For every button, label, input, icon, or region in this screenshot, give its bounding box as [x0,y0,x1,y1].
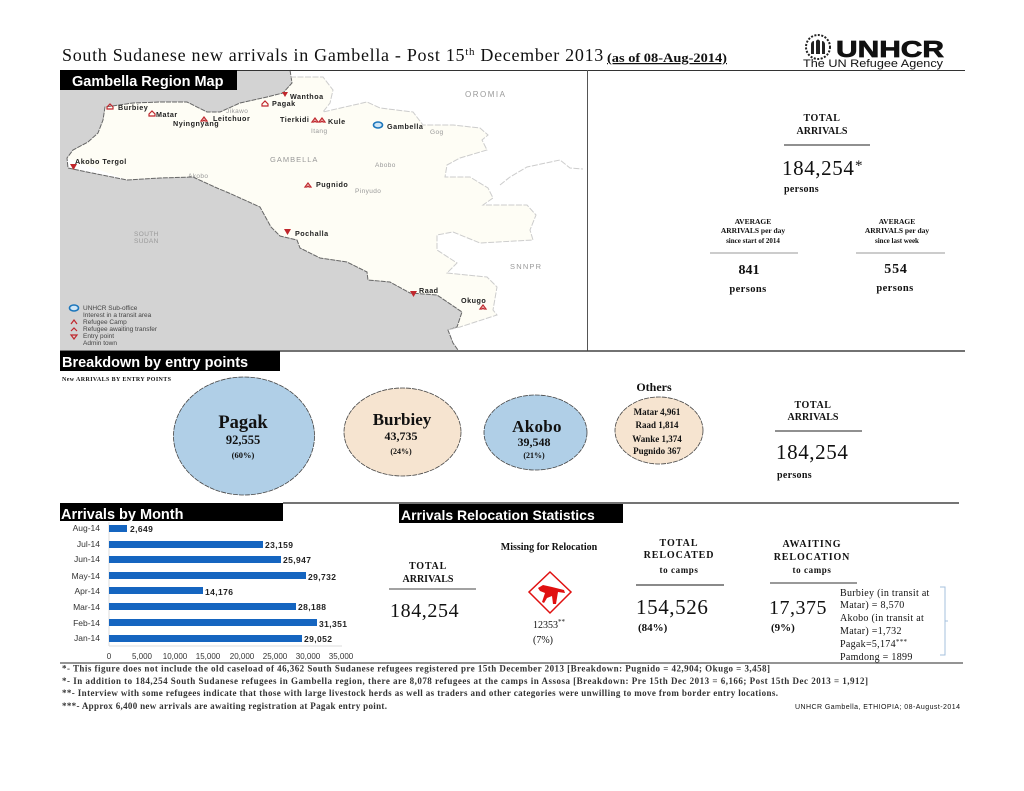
heading: Breakdown by entry points: Breakdown by entry points [62,355,248,371]
bar: Mar-14: 28,188 [298,602,326,612]
bar: Mar-14 [73,602,326,612]
map: legend [70,305,158,347]
stat: average arrivals since last week: 554 [884,262,908,277]
bubble: Akobo: 39,548 [518,435,550,449]
footnotes: *- This figure does not include the old caseload of 46,362 South Sudanese refugees registered pre 15th December 2013 [Breakdown: Pugnido = 42,904; Okugo = 3,458] [62,664,770,674]
bar: Jan-14 [74,633,332,644]
bubble: Pagak: (60%) [232,450,254,460]
bubble: Others: Matar 4,961 [634,407,681,417]
callout: awaiting relocation breakdown: Pamdong = 1899 [840,652,913,663]
bubble: Others: Raad 1,814 [635,420,679,430]
bar: Jul-14: Jul-14 [77,539,100,549]
icon: UNHCR logo: UNHCR [836,36,944,62]
stat: average arrivals since last week: ARRIVALS per day [865,226,929,235]
map: place labels: Itang [311,128,327,135]
stat: total arrivals [782,113,870,195]
map: place labels: Nyingnyang [173,119,219,128]
map: place labels: Kule [328,117,346,126]
chart axis labels: 0 [107,652,112,661]
bar: Apr-14: 14,176 [205,587,233,597]
map: place labels: OROMIA [465,90,506,99]
map: place labels: Jikawo [226,108,248,115]
map: place labels: Tierkidi [280,115,309,124]
stat: missing for relocation: Missing for Relocation [501,542,598,553]
map: international border [67,70,462,350]
map: place labels: SNNPR [510,262,542,271]
map: place labels: Okugo [461,296,486,305]
stat: average arrivals since last week: persons [876,283,914,294]
title: December 2013 [475,45,604,65]
icon: UNHCR logo: The UN Refugee Agency [803,58,944,70]
footnotes: ***- Approx 6,400 new arrivals are awaiting registration at Pagak entry point. [62,701,387,711]
bar: Apr-14 [74,586,233,597]
chart axis labels: 35,000 [329,652,354,661]
bar: Jul-14 [77,539,293,550]
callout: awaiting relocation breakdown: Pagak=5,174 [840,639,896,650]
bar: Aug-14: Aug-14 [73,523,100,533]
chart axis labels [107,652,354,661]
bubble: Akobo: Akobo [512,417,562,436]
stat: average arrivals since last week [856,217,945,294]
map: place labels: Raad [419,286,439,295]
map: place labels: Akobo Tergol [75,157,127,166]
callout: awaiting relocation breakdown: Matar) = 8,570 [840,600,905,611]
bar: Feb-14: 31,351 [319,619,347,629]
stat: average arrivals since last week: AVERAGE [879,217,915,226]
stat: total arrivals: persons [784,184,819,195]
map: place labels: Wanthoa [290,92,324,101]
stat: missing for relocation [501,542,598,646]
stat: total arrivals (entry points): ARRIVALS [788,412,839,423]
map: place labels: Gog [430,129,444,136]
footnotes: *- In addition to 184,254 South Sudanese refugees in Gambella region, there are 8,078 refugees at the camps in Assosa [Breakdown: Pre 15th Dec 2013 = 6,166; Post 15th Dec 2013 = 1,912] [62,676,868,686]
map: place labels: Abobo [375,162,396,169]
callout: awaiting relocation breakdown [840,587,948,663]
stat: average arrivals since start: persons [729,284,767,295]
bar: Apr-14: Apr-14 [74,586,100,596]
title [62,45,727,65]
map: place labels: Pochalla [295,229,329,238]
bubble: Others: Others [636,380,672,394]
bar: Jun-14: 25,947 [283,555,311,565]
callout: awaiting relocation breakdown: Akobo (in transit at [840,613,924,624]
bar: Jun-14: Jun-14 [74,554,100,564]
stat: awaiting relocation [769,539,857,634]
map: place labels: Leitchuor [213,114,250,123]
stat: total arrivals: TOTAL [803,113,841,124]
panel: entry point bubbles [174,377,703,495]
map: legend: Entry point [83,333,114,340]
bar: Jun-14 [74,554,311,565]
panel: headline totals [710,113,945,295]
stat: awaiting relocation: 17,375 [769,597,827,619]
stat: missing for relocation: 12353 [533,620,558,631]
callout: awaiting relocation breakdown: Burbiey (in transit at [840,588,930,599]
stat: average arrivals since start: 841 [738,263,760,278]
bar: Jan-14: 29,052 [304,634,332,644]
map: place labels [75,90,542,305]
bubble: Others [615,380,703,464]
bar: Feb-14 [73,618,347,629]
heading: Arrivals by Month [60,503,283,523]
stat: awaiting relocation: RELOCATION [774,552,850,563]
map: legend: Refugee awaiting transfer [83,326,158,333]
stat: total arrivals (entry points): 184,254 [776,440,848,464]
stat: total arrivals: * [855,158,862,174]
map: legend: UNHCR Sub-office [83,305,138,312]
stat: total arrivals (entry points): TOTAL [794,400,832,411]
stat: total arrivals: ARRIVALS [797,126,848,137]
stat: total arrivals (relocation): ARRIVALS [403,574,454,585]
bubble: Burbiey [344,388,461,476]
bar chart: arrivals by month [72,522,354,661]
stat: total relocated: RELOCATED [644,550,714,561]
stat: total arrivals (entry points): persons [777,470,812,481]
title: th [465,46,475,58]
map: South Sudan territory [60,70,462,350]
stat: average arrivals since last week: since last week [875,237,919,245]
map: legend: Refugee Camp [83,319,127,326]
title: (as of 08-Aug-2014) [607,51,727,65]
stat: total relocated [636,538,724,634]
stat: total arrivals: 184,254 [782,156,854,180]
map: place labels: Burbiey [118,103,148,112]
stat: total arrivals (relocation): TOTAL [409,561,447,572]
source credit: UNHCR Gambella, ETHIOPIA; 08-August-2014 [795,704,960,711]
map: place labels: Akobo [188,173,208,180]
map: place labels: Pugnido [316,180,348,189]
heading: Breakdown by entry points [60,351,280,371]
stat: awaiting relocation: to camps [792,565,832,575]
stat: total relocated: TOTAL [659,538,699,549]
stat: total arrivals (entry points) [775,400,862,481]
caption: new arrivals by entry points: New ARRIVALS BY ENTRY POINTS [62,377,172,383]
callout: awaiting relocation breakdown: *** [896,638,907,646]
map: place labels: Pinyudo [355,188,381,195]
stat: missing for relocation: ** [558,618,566,626]
chart axis labels: 25,000 [263,652,288,661]
map: place labels: GAMBELLA [270,155,318,164]
heading: Arrivals by Month: Arrivals by Month [61,507,183,523]
icon: UNHCR logo [803,35,944,70]
bubble: Burbiey: Burbiey [373,410,432,429]
bubble: Burbiey: (24%) [390,447,412,456]
stat: missing for relocation: (7%) [533,635,553,646]
map: place labels: SUDAN [134,238,159,245]
bar: Jul-14: 23,159 [265,540,293,550]
stat: average arrivals since start: since start of 2014 [726,237,780,245]
map: place labels: Matar [156,110,178,119]
stat: total arrivals (relocation): 184,254 [390,600,459,622]
map: regional boundaries [290,77,583,330]
callout: awaiting relocation breakdown: Matar) =1,732 [840,626,902,637]
stat: awaiting relocation: (9%) [771,622,795,634]
map: legend: Admin town [83,340,117,347]
stat: total arrivals (relocation) [389,561,476,622]
stat: total relocated: to camps [659,565,699,575]
heading: Arrivals Relocation Statistics: Arrivals Relocation Statistics [401,507,595,523]
bubble: Pagak: 92,555 [226,433,260,447]
bar: Jan-14: Jan-14 [74,633,100,643]
rule lines [60,70,965,663]
bar: Aug-14 [73,523,153,534]
stat: awaiting relocation: AWAITING [783,539,841,550]
heading: Gambella Region Map [60,70,237,90]
bubble: Burbiey: 43,735 [384,429,418,443]
footnotes [62,664,868,711]
icon: red warning diamond [529,572,571,613]
bar: Aug-14: 2,649 [130,524,153,534]
chart axis labels: 15,000 [196,652,221,661]
title: South Sudanese new arrivals in Gambella - Post 15 [62,45,465,65]
bar: May-14: 29,732 [308,572,336,582]
stat: total relocated: (84%) [638,622,668,634]
bubble: Pagak [174,377,314,495]
panel: Gambella region map [60,70,587,350]
map: markers [70,92,486,309]
bubble: Pagak: Pagak [218,413,268,433]
bar: Feb-14: Feb-14 [73,618,100,628]
chart axis labels: 20,000 [230,652,255,661]
map: place labels: Pagak [272,99,296,108]
stat: average arrivals since start [710,217,798,295]
chart axis labels: 10,000 [163,652,188,661]
heading: Gambella Region Map: Gambella Region Map [72,74,224,90]
bubble: Others: Pugnido 367 [633,446,681,456]
bubble: Akobo [484,395,587,470]
stat: average arrivals since start: AVERAGE [735,217,771,226]
chart axis labels: 30,000 [296,652,321,661]
bubble: Others: Wanke 1,374 [632,434,682,444]
stat: average arrivals since start: ARRIVALS per day [721,226,785,235]
bar: Mar-14: Mar-14 [73,602,100,612]
footnotes: **- Interview with some refugees indicate that those with large livestock herds as well as traders and other categories were unwilling to move from border entry locations. [62,688,778,698]
bar: May-14: May-14 [72,571,100,581]
map: place labels: Gambella [387,122,424,131]
map: legend: Interest in a transit area [83,312,152,319]
stat: total relocated: 154,526 [636,595,708,619]
map: place labels: SOUTH [134,231,159,238]
bar: May-14 [72,571,336,582]
bubble: Akobo: (21%) [523,451,545,460]
map: Gambella region land [67,77,536,330]
chart axis labels: 5,000 [132,652,153,661]
